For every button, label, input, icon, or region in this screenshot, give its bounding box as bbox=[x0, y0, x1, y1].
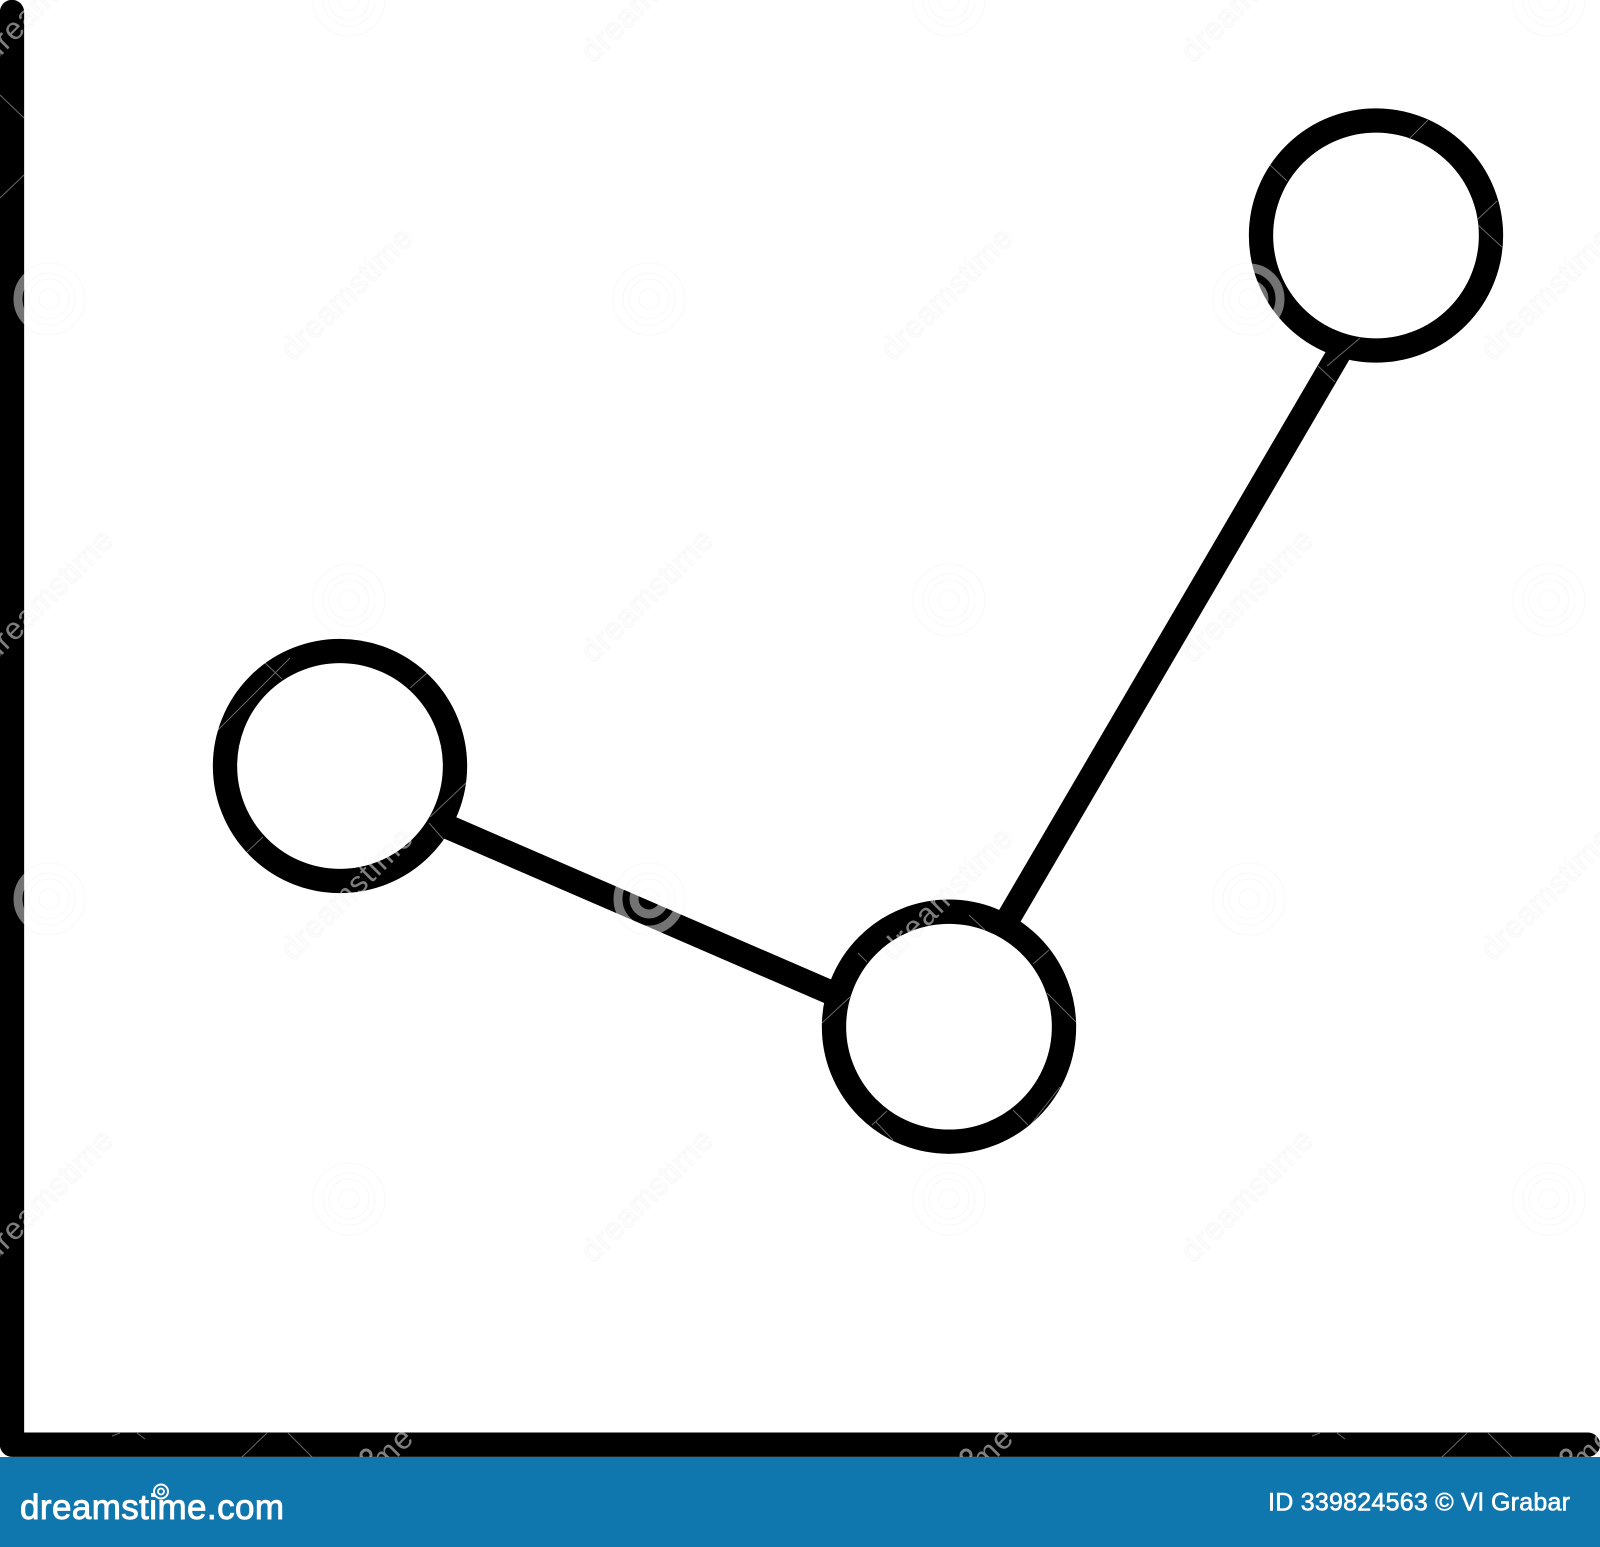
logo spiral bbox=[154, 1484, 168, 1498]
segment: first to second point bbox=[440, 824, 840, 997]
watermark: spiral marks bbox=[13, 0, 1585, 1235]
watermark: diagonal dreamstime text: dreamstime bbox=[273, 220, 420, 367]
watermark: diagonal dreamstime text: dreamstime bbox=[273, 820, 420, 967]
watermark: diagonal dreamstime text: dreamstime bbox=[573, 1122, 720, 1269]
watermark: diagonal dreamstime text: dreamstime bbox=[1173, 1122, 1320, 1269]
spiral outer ring bbox=[154, 1484, 168, 1498]
watermark: diagonal dreamstime text: dreamstime bbox=[573, 522, 720, 669]
segment: second to third point bbox=[1007, 350, 1341, 920]
footer background bbox=[0, 1457, 1600, 1547]
data line segments bbox=[440, 350, 1341, 997]
spiral inner ring bbox=[158, 1488, 164, 1494]
logo wordmark: dreamstime.com bbox=[20, 1488, 284, 1527]
watermark: diagonal dreamstime text: dreamstime bbox=[873, 820, 1020, 967]
dreamstime logo bbox=[20, 1484, 284, 1527]
watermark: diagonal dreamstime text: dreamstime bbox=[1173, 522, 1320, 669]
image ID and credit: ID 339824563 © Vl Grabar bbox=[1268, 1488, 1570, 1516]
data point 1 bbox=[225, 651, 455, 881]
footer bar bbox=[0, 1457, 1600, 1547]
data points bbox=[225, 120, 1491, 1142]
data point 3 bbox=[1261, 120, 1491, 350]
data point 2 bbox=[834, 912, 1064, 1142]
watermark: diagonal dreamstime text: dreamstime bbox=[873, 220, 1020, 367]
